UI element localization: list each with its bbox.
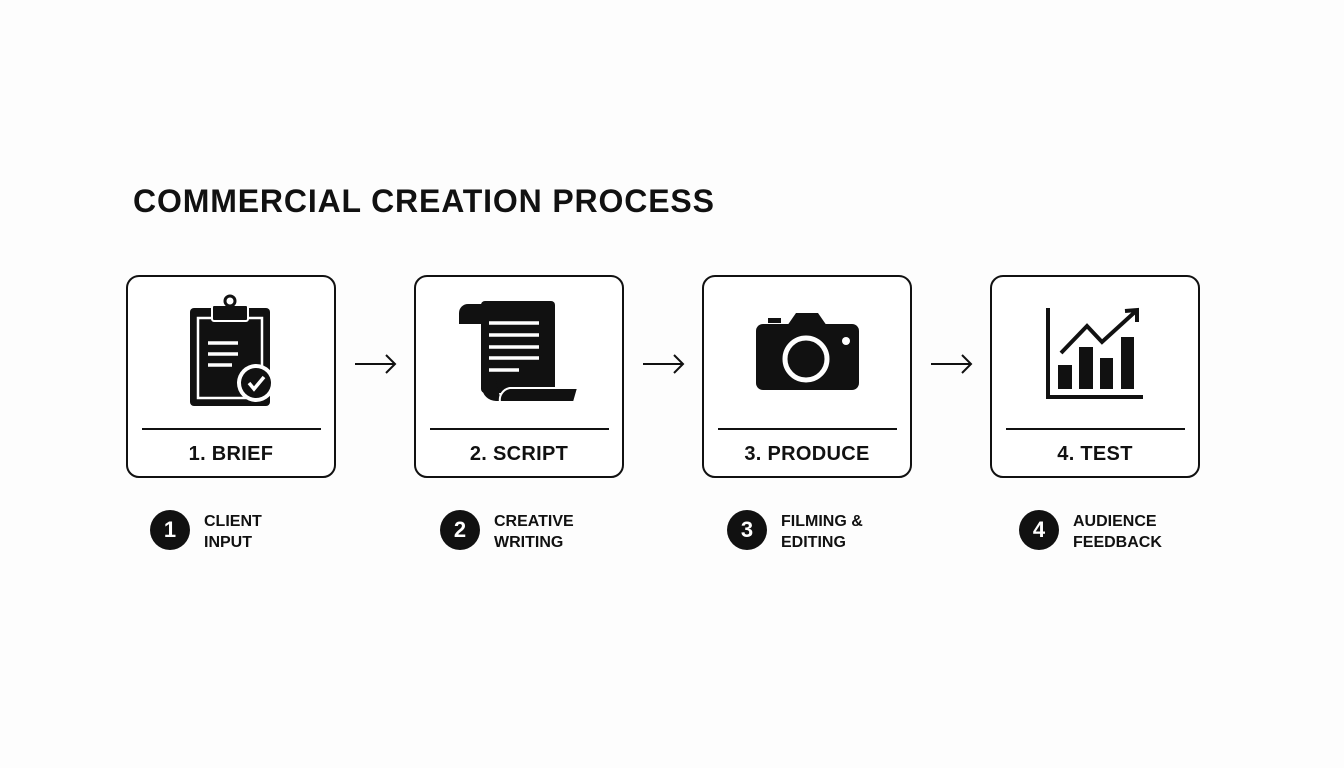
icon: scroll bbox=[458, 300, 578, 402]
step 4: audience feedback bbox=[1019, 510, 1162, 551]
step 4: audience feedback: AUDIENCE bbox=[1073, 513, 1157, 530]
label: brief: 1. BRIEF bbox=[189, 443, 273, 465]
step 2: creative writing: WRITING bbox=[494, 534, 563, 551]
step 2: creative writing: 2 bbox=[454, 517, 466, 542]
step 1: client input: INPUT bbox=[204, 534, 252, 551]
panel: 4. test bbox=[990, 275, 1200, 478]
step 1: client input: CLIENT bbox=[204, 513, 262, 530]
icon: camera bbox=[756, 312, 858, 390]
step 3: filming & editing: 3 bbox=[741, 517, 753, 542]
label: test: 4. TEST bbox=[1057, 443, 1133, 465]
step 3: filming & editing: FILMING & bbox=[781, 513, 863, 530]
step 2: creative writing bbox=[440, 510, 574, 551]
step 3: filming & editing bbox=[727, 510, 863, 551]
arrow 3 bbox=[931, 354, 972, 374]
arrow 2 bbox=[643, 354, 684, 374]
panel: 1. brief bbox=[126, 275, 336, 478]
title: COMMERCIAL CREATION PROCESS bbox=[133, 183, 715, 219]
label: produce: 3. PRODUCE bbox=[744, 443, 870, 465]
step 1: client input: 1 bbox=[164, 517, 176, 542]
step 3: filming & editing: EDITING bbox=[781, 534, 846, 551]
panel: 2. script bbox=[414, 275, 624, 478]
label: script: 2. SCRIPT bbox=[470, 443, 568, 465]
panel: 3. produce bbox=[702, 275, 912, 478]
step 4: audience feedback: FEEDBACK bbox=[1073, 534, 1162, 551]
step 1: client input bbox=[150, 510, 262, 551]
icon: bar chart bbox=[1048, 308, 1142, 396]
arrow 1 bbox=[355, 354, 396, 374]
step 4: audience feedback: 4 bbox=[1033, 517, 1045, 542]
icon: clipboard bbox=[190, 296, 274, 406]
step 2: creative writing: CREATIVE bbox=[494, 513, 574, 530]
